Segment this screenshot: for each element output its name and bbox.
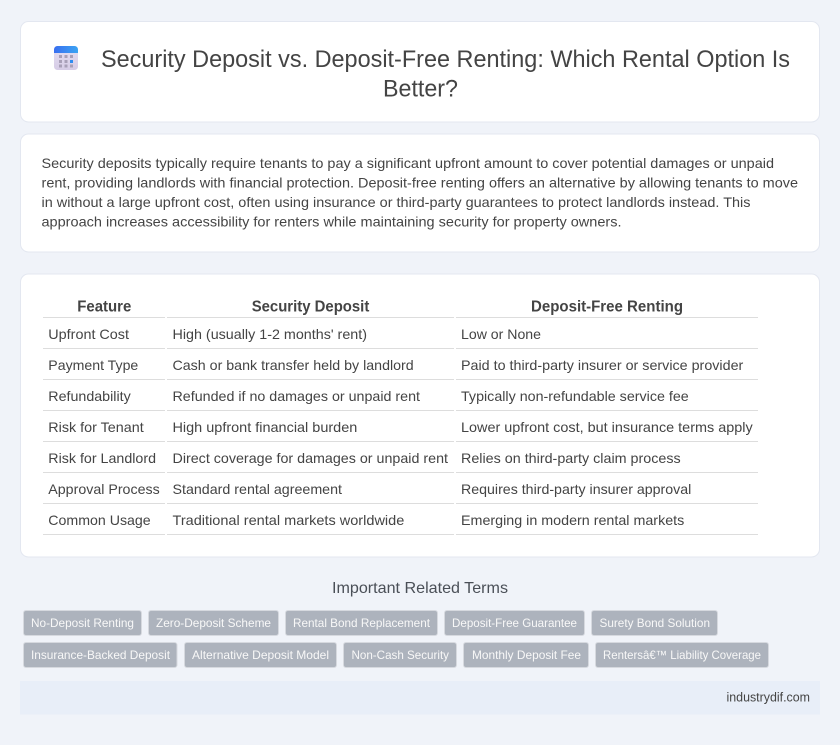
row: risk for landlord: Relies on third-party claim process	[461, 450, 681, 466]
row: risk for tenant: High upfront financial burden	[172, 419, 357, 435]
row: payment type	[43, 357, 758, 380]
row: payment type: Payment Type	[48, 357, 139, 373]
table header row: Feature	[77, 299, 132, 316]
chip	[286, 610, 438, 636]
heading: important related terms: Important Related Terms	[332, 580, 508, 597]
chip	[596, 642, 768, 668]
row: refundability	[43, 388, 758, 410]
title: Better?	[383, 76, 458, 102]
row: risk for landlord	[43, 450, 758, 472]
row: risk for tenant: Lower upfront cost, but insurance terms apply	[461, 419, 753, 435]
chip: Zero-Deposit Scheme	[156, 616, 271, 630]
panel: introduction text: in without a large upfront cost, often using insurance or third-party guarantees to protect landlords instead. This	[42, 194, 750, 210]
panel: introduction text: rent, providing landlords with financial protection. Deposit-free renting offers an alternative by allowing tenants to move	[42, 174, 798, 190]
panel: introduction text	[20, 134, 820, 252]
row: payment type: Cash or bank transfer held by landlord	[172, 357, 414, 373]
row: common usage: Common Usage	[48, 512, 151, 528]
table header row: Deposit-Free Renting	[531, 299, 683, 316]
row: risk for tenant: Risk for Tenant	[48, 419, 144, 435]
chip: No-Deposit Renting	[31, 616, 134, 630]
row: refundability: Refunded if no damages or unpaid rent	[172, 388, 420, 404]
row: common usage: Traditional rental markets worldwide	[172, 512, 405, 528]
title: Security Deposit vs. Deposit-Free Renting: Which Rental Option Is	[101, 46, 790, 73]
chip	[444, 610, 584, 636]
related terms chips	[24, 610, 768, 668]
panel: comparison table	[20, 274, 820, 557]
chip: Monthly Deposit Fee	[472, 648, 581, 662]
chip: Insurance-Backed Deposit	[31, 648, 171, 662]
row: payment type: Paid to third-party insurer or service provider	[461, 357, 744, 373]
panel: introduction text: Security deposits typically require tenants to pay a significant upfront amount to cover potential damages or unpaid	[42, 155, 774, 171]
chip: Rental Bond Replacement	[293, 616, 431, 630]
chip: Rentersâ€™ Liability Coverage	[603, 648, 761, 662]
row: refundability: Refundability	[48, 388, 131, 404]
table header row: Security Deposit	[252, 299, 369, 316]
chip	[24, 610, 142, 636]
row: refundability: Typically non-refundable service fee	[461, 388, 689, 404]
row: common usage	[43, 512, 758, 534]
chip	[344, 642, 456, 668]
row: risk for tenant	[43, 419, 758, 442]
row: approval process: Standard rental agreement	[172, 481, 342, 497]
chip	[148, 610, 278, 636]
chip: Deposit-Free Guarantee	[452, 616, 577, 630]
chip	[184, 642, 336, 668]
row: approval process: Approval Process	[48, 481, 160, 497]
table header row	[43, 299, 758, 318]
chip	[592, 610, 718, 636]
chip	[24, 642, 177, 668]
row: approval process: Requires third-party insurer approval	[461, 481, 691, 497]
title	[101, 46, 790, 102]
icon: calendar	[54, 46, 78, 70]
row: risk for landlord: Direct coverage for damages or unpaid rent	[172, 450, 448, 466]
chip: Non-Cash Security	[352, 648, 449, 662]
panel: introduction text: approach increases accessibility for renters while maintaining security for property owners.	[42, 214, 622, 230]
row: upfront cost: High (usually 1-2 months' rent)	[172, 326, 367, 342]
chip	[464, 642, 588, 668]
row: upfront cost	[43, 326, 758, 348]
panel: title header	[20, 22, 820, 122]
row: common usage: Emerging in modern rental markets	[461, 512, 684, 528]
footer bar	[20, 681, 820, 714]
chip: Surety Bond Solution	[600, 616, 710, 630]
row: upfront cost: Upfront Cost	[48, 326, 129, 342]
row: approval process	[43, 481, 758, 504]
footer bar: industrydif.com	[726, 691, 810, 705]
row: risk for landlord: Risk for Landlord	[48, 450, 156, 466]
chip: Alternative Deposit Model	[192, 648, 329, 662]
row: upfront cost: Low or None	[461, 326, 541, 342]
